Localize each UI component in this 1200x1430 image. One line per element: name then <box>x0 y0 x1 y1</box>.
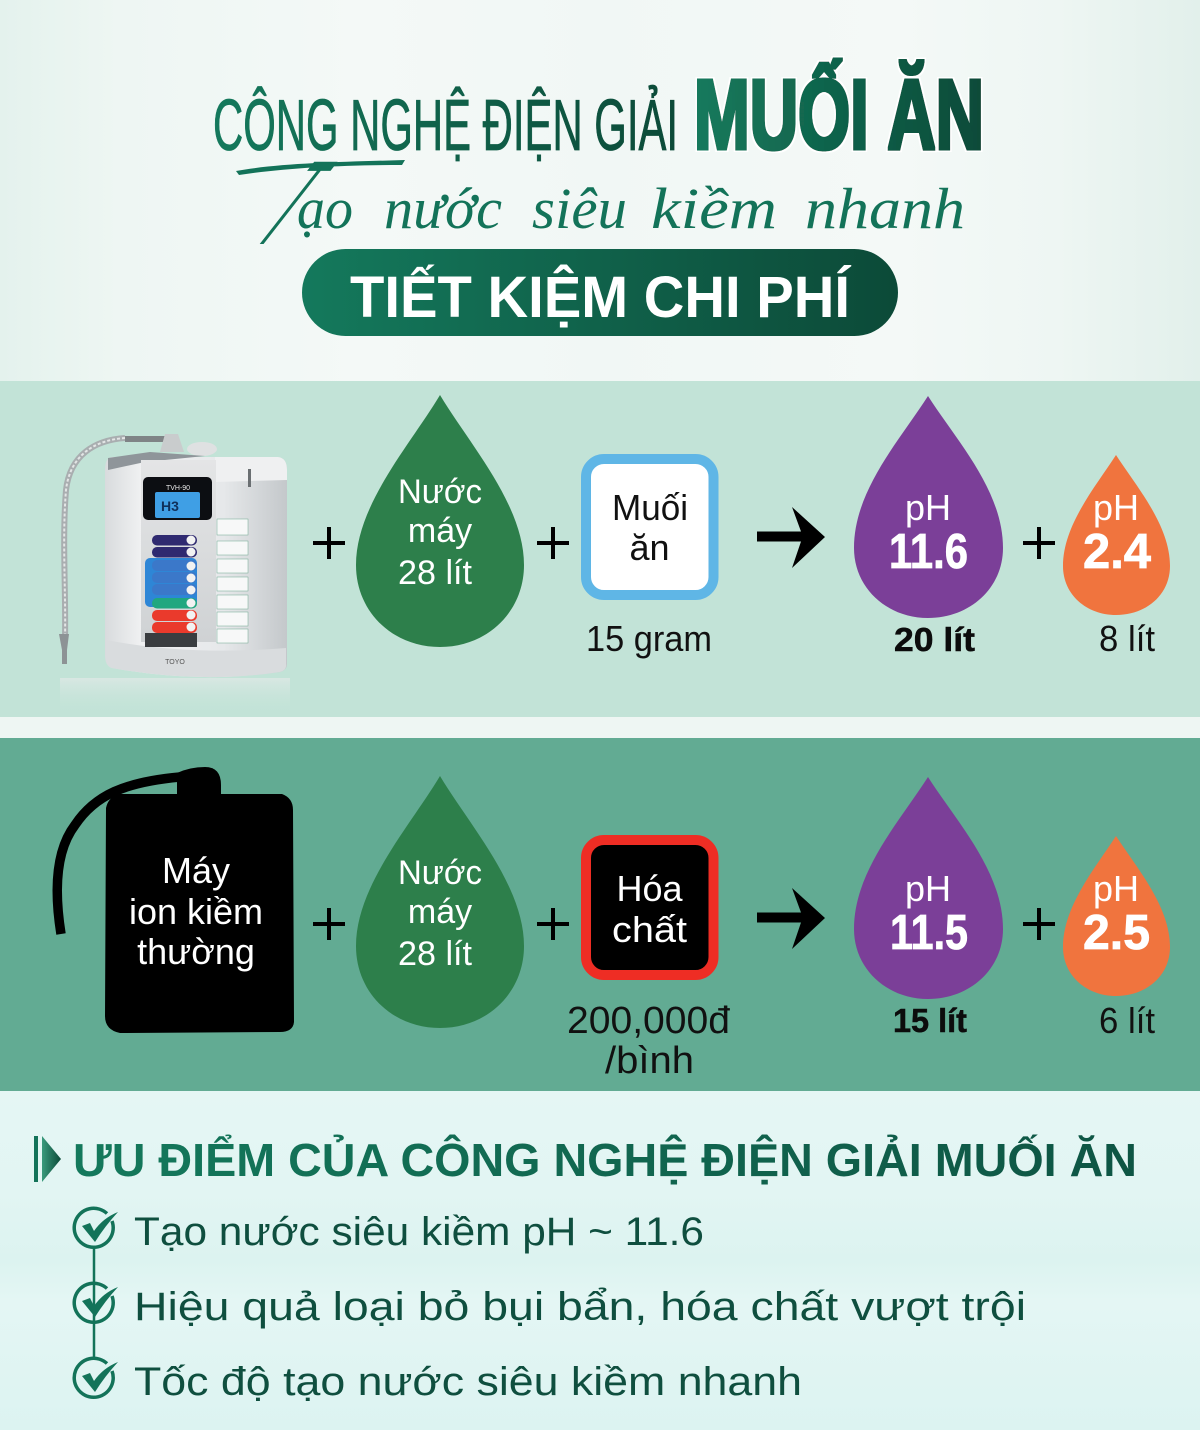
icon: ordinary machine silhouette: thường <box>137 931 255 972</box>
salt amount: 15 gram <box>586 618 712 659</box>
advantage 2: Hiệu quả loại bỏ bụi bẩn, hóa chất vượt trội <box>134 1285 1026 1329</box>
drop: alkaline pH 11.6 <box>854 396 1003 618</box>
script subtitle: siêu <box>532 176 627 241</box>
icon: ordinary machine silhouette <box>57 767 294 1033</box>
script subtitle <box>229 135 965 270</box>
salt box: Muối <box>612 487 688 528</box>
water drop: tap water: 28 lít <box>398 554 473 592</box>
check icon 2 <box>74 1283 118 1322</box>
panel: salt electrolysis row <box>0 381 1200 717</box>
icon: ordinary machine silhouette: Máy <box>162 850 230 891</box>
water drop: tap water: 28 lít <box>398 935 473 973</box>
chemical box: chất <box>612 909 687 950</box>
volume 15 lít: 15 lít <box>893 1002 967 1039</box>
plus <box>1023 527 1055 559</box>
header background <box>0 0 1200 381</box>
water drop: tap water: Nước <box>398 854 482 892</box>
title line: công nghệ điện giải: CÔNG NGHỆ ĐIỆN GIẢI <box>213 85 678 166</box>
advantage 3: Tốc độ tạo nước siêu kiềm nhanh <box>134 1360 802 1404</box>
chemical box <box>586 840 714 975</box>
plus <box>537 527 569 559</box>
drop: alkaline pH 11.5: 11.5 <box>890 906 968 960</box>
water drop: tap water <box>356 395 524 647</box>
title <box>213 59 984 171</box>
drop: alkaline pH 11.6: 11.6 <box>889 525 968 579</box>
machine display <box>143 477 212 520</box>
drop: acid pH 2.4 <box>1063 455 1170 615</box>
script capital T: T <box>229 135 359 270</box>
plus <box>537 908 569 940</box>
icon: ordinary machine silhouette: ion kiềm <box>129 891 263 932</box>
icon: water ionizer machine: TOYO <box>165 659 185 666</box>
chemical price: 200,000đ <box>567 1000 731 1042</box>
title highlight: muối ăn: MUỐI ĂN <box>694 59 984 171</box>
chemical price <box>567 1000 731 1082</box>
plus <box>313 908 345 940</box>
script subtitle: ạo <box>297 176 353 241</box>
icon: water ionizer machine <box>59 434 290 716</box>
arrow <box>757 507 825 568</box>
drop: acid pH 2.4: 2.4 <box>1083 525 1151 579</box>
icon: water ionizer machine: H3 <box>161 498 179 514</box>
water drop: tap water: Nước <box>398 473 482 511</box>
volume 20 lít: 20 lít <box>894 621 975 658</box>
machine side labels <box>217 519 248 643</box>
check icon 3 <box>74 1358 118 1397</box>
arrow <box>757 888 825 949</box>
drop: alkaline pH 11.5: pH <box>905 868 951 909</box>
drop: acid pH 2.4: pH <box>1093 487 1139 528</box>
drop: alkaline pH 11.5 <box>854 777 1003 999</box>
panel: ordinary ionizer row <box>0 738 1200 1091</box>
water drop: tap water <box>356 776 524 1028</box>
chemical price: /bình <box>605 1040 694 1082</box>
water drop: tap water: máy <box>408 512 472 550</box>
chemical box: Hóa <box>616 868 683 909</box>
drop: acid pH 2.5: 2.5 <box>1083 906 1150 960</box>
connector line <box>93 1248 95 1358</box>
script subtitle: nhanh <box>805 176 965 241</box>
volume 6 lít: 6 lít <box>1099 1000 1155 1041</box>
icon: water ionizer machine: TVH-90 <box>166 485 190 492</box>
machine buttons <box>145 535 197 647</box>
plus <box>1023 908 1055 940</box>
icon: heading marker <box>34 1136 61 1182</box>
pill: tiết kiệm chi phí <box>302 249 898 336</box>
volume 8 lít: 8 lít <box>1099 618 1155 659</box>
drop: acid pH 2.5: pH <box>1093 868 1139 909</box>
advantage 1: Tạo nước siêu kiềm pH ~ 11.6 <box>134 1210 704 1254</box>
heading: ƯU ĐIỂM CỦA CÔNG NGHỆ ĐIỆN GIẢI MUỐI ĂN <box>73 1134 1137 1186</box>
salt box <box>586 459 714 595</box>
script subtitle: nước <box>384 176 502 241</box>
script subtitle: kiềm <box>651 176 777 241</box>
drop: acid pH 2.5 <box>1063 836 1170 996</box>
panel: advantages <box>0 1091 1200 1430</box>
water drop: tap water: máy <box>408 893 472 931</box>
salt box: ăn <box>629 527 670 568</box>
check icon 1 <box>74 1208 118 1247</box>
pill: tiết kiệm chi phí: TIẾT KIỆM CHI PHÍ <box>350 265 852 330</box>
drop: alkaline pH 11.6: pH <box>905 487 951 528</box>
plus <box>313 527 345 559</box>
